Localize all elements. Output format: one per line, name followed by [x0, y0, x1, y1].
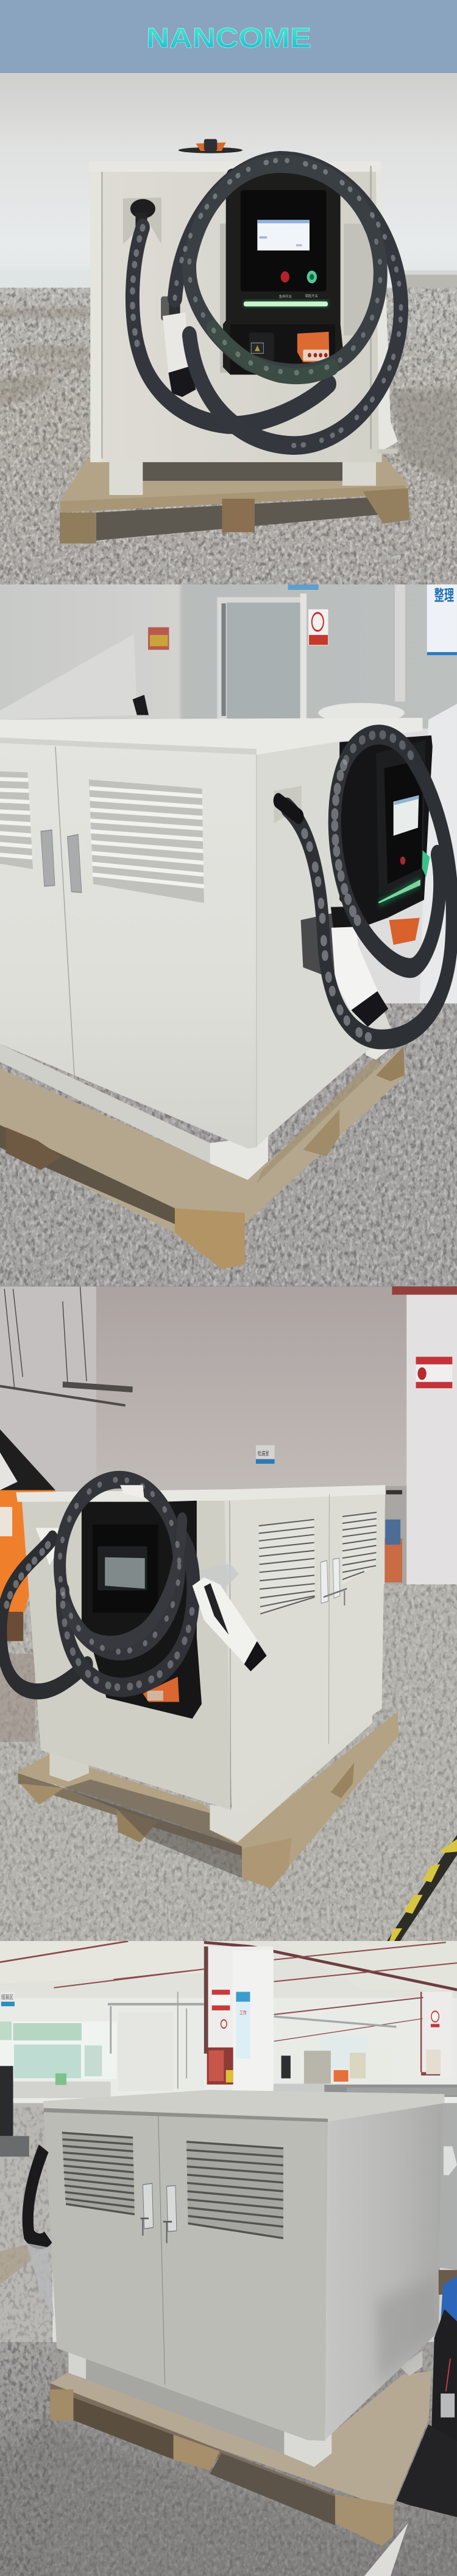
wall zone sign	[1, 1992, 15, 2007]
cable port	[274, 786, 302, 823]
background machines	[12, 2049, 457, 2098]
charger control panel	[220, 169, 373, 374]
ceiling pipes	[0, 1941, 457, 2072]
photo 1: charger front view	[0, 74, 457, 584]
right louvre	[342, 1512, 377, 1584]
ducts and hanging frame	[108, 1992, 396, 2089]
charger panel side view	[339, 735, 433, 945]
charging plug	[301, 907, 388, 1027]
wrapped charging cable	[278, 734, 452, 1039]
wall zone sign: 组装区	[1, 1993, 13, 2001]
background orange vehicle	[0, 1430, 55, 1641]
foreground black case with blue bag	[396, 2276, 457, 2517]
door handles	[141, 2183, 177, 2243]
door and frame	[217, 584, 405, 720]
right pillar	[421, 1992, 452, 2079]
wall signs: 整理	[434, 587, 454, 605]
pallet	[60, 447, 409, 544]
pallet	[0, 1046, 405, 1269]
charger control panel: 钥匙开关	[305, 293, 318, 298]
cabinet with louvred doors	[0, 718, 423, 1180]
wrapped charging cable coils	[132, 160, 401, 446]
cabinet body	[16, 1485, 385, 1842]
left door louvre	[0, 771, 33, 869]
floor	[0, 1003, 457, 1291]
door handles and key	[321, 1558, 347, 1606]
central pillar: 工作	[239, 2010, 247, 2016]
wrapped cable behind cabinet	[26, 2149, 54, 2317]
charger control panel: 急停开关	[279, 295, 292, 299]
cable port	[35, 1528, 60, 1565]
left louvre	[62, 2132, 135, 2215]
charging plug	[193, 1578, 267, 1671]
charging plug	[161, 295, 196, 397]
pallet	[50, 2371, 431, 2546]
wall brackets	[0, 1286, 133, 1405]
right door louvre	[89, 779, 204, 903]
floor safety stripe	[386, 1835, 457, 1942]
wall signs	[148, 584, 457, 655]
cable slot and holder	[123, 197, 161, 244]
header banner	[0, 0, 457, 73]
pallet	[18, 1711, 399, 1889]
charger panel rear view	[82, 1501, 202, 1719]
wall signs: 检漏室	[258, 1450, 269, 1457]
logo: NANCOME: NANCOME	[146, 22, 311, 54]
wall signs	[256, 1356, 452, 1464]
central pillar	[204, 1946, 274, 2095]
photo 4: cabinet door view in factory hall	[0, 1930, 457, 2576]
photo 3: cabinet rear-side view in workshop	[0, 1285, 457, 1942]
wrapped charging cable	[1, 1479, 239, 1691]
door handles	[41, 830, 82, 893]
floor	[0, 2066, 457, 2576]
cabinet body	[43, 2090, 444, 2467]
photo 2: cabinet angled view with doors	[0, 584, 457, 1291]
orange connector	[297, 332, 329, 362]
factory windows	[0, 2021, 369, 2079]
right side equipment	[384, 1490, 402, 1582]
floor	[0, 1584, 457, 1942]
charging cabinet	[89, 161, 398, 495]
left louvre	[259, 1518, 315, 1614]
right louvre	[186, 2141, 283, 2239]
neighbouring cabinet at right	[439, 2103, 457, 2295]
top connector	[179, 139, 243, 153]
